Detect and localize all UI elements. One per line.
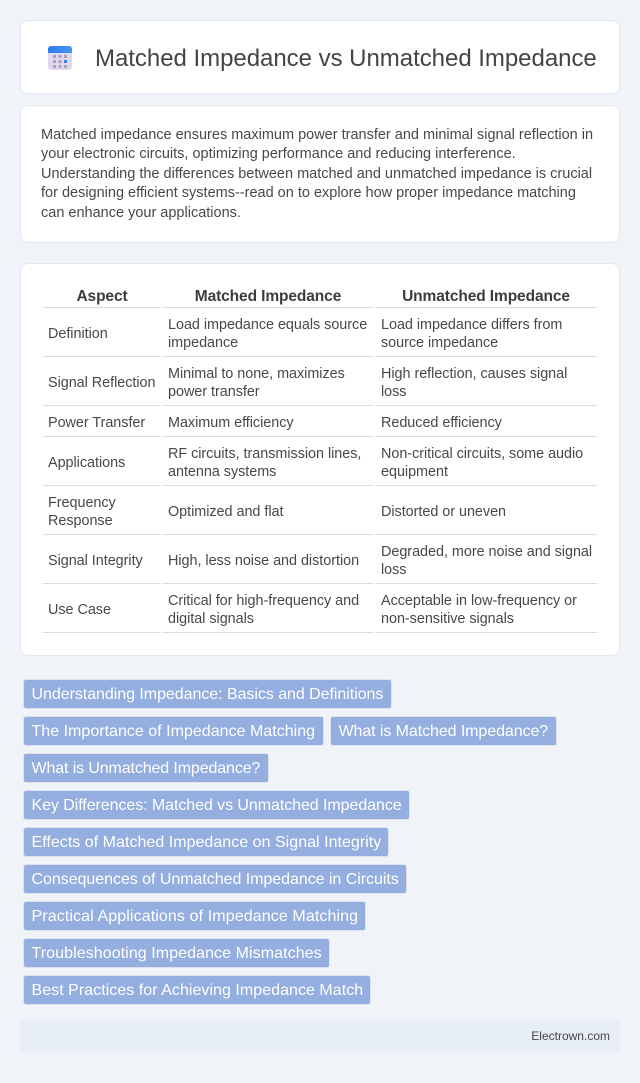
row: signal reflection: loss (381, 384, 406, 400)
tag: Consequences of Unmatched Impedance in Circuits (32, 871, 399, 888)
tag: Key Differences: Matched vs Unmatched Impedance (32, 797, 402, 814)
row: applications: RF circuits, transmission lines, (168, 446, 361, 462)
tag: Understanding Impedance: Basics and Definitions (32, 686, 383, 703)
intro paragraph (41, 126, 593, 220)
header panel (20, 20, 620, 94)
row: use case (48, 593, 577, 627)
row lines (43, 307, 597, 633)
row: use case: Use Case (48, 602, 111, 618)
icon: calendar grid (48, 46, 72, 70)
row: signal integrity: loss (381, 562, 406, 578)
title: Matched Impedance vs Unmatched Impedance (95, 45, 597, 72)
footer credit: Electrown.com (531, 1029, 610, 1043)
row: signal integrity (48, 544, 592, 578)
row: frequency response: Distorted or uneven (381, 504, 506, 520)
row: power transfer (48, 415, 502, 431)
tag: What is Unmatched Impedance? (32, 760, 260, 777)
tag: Effects of Matched Impedance on Signal Integrity (32, 834, 381, 851)
row: applications (48, 446, 583, 480)
tag (23, 827, 389, 857)
intro paragraph: your electronic circuits, optimizing performance and reducing interference. (41, 146, 516, 162)
row: applications: antenna systems (168, 464, 276, 480)
tag (23, 790, 410, 820)
tag: The Importance of Impedance Matching (32, 723, 315, 740)
tag: What is Matched Impedance? (338, 723, 548, 740)
tag: Troubleshooting Impedance Mismatches (32, 945, 322, 962)
intro paragraph: Understanding the differences between matched and unmatched impedance is crucial (41, 166, 592, 182)
comparison table panel (20, 263, 620, 656)
row: power transfer: Power Transfer (48, 415, 145, 431)
row: power transfer: Reduced efficiency (381, 415, 502, 431)
intro paragraph: can enhance your applications. (41, 204, 241, 220)
table header: Unmatched Impedance (402, 288, 570, 305)
tag (23, 679, 392, 709)
row: applications: Non-critical circuits, some audio (381, 446, 583, 462)
tag (330, 716, 557, 746)
row: frequency response: Frequency (48, 495, 116, 511)
row: signal reflection: Minimal to none, maximizes (168, 366, 345, 382)
tag: Best Practices for Achieving Impedance Match (32, 982, 363, 999)
tag (23, 864, 407, 894)
row: signal integrity: Degraded, more noise and signal (381, 544, 592, 560)
row: signal reflection: Signal Reflection (48, 375, 155, 391)
row: signal integrity: High, less noise and distortion (168, 553, 359, 569)
row: use case: digital signals (168, 611, 254, 627)
row: power transfer: Maximum efficiency (168, 415, 294, 431)
tag: Practical Applications of Impedance Matching (32, 908, 358, 925)
intro paragraph: for designing efficient systems--read on to explore how proper impedance matching (41, 185, 576, 201)
table header (76, 288, 570, 305)
row: signal reflection: power transfer (168, 384, 260, 400)
table header: Aspect (76, 288, 128, 305)
row: use case: Critical for high-frequency and (168, 593, 359, 609)
row: signal integrity: Signal Integrity (48, 553, 143, 569)
tag (23, 975, 371, 1005)
row: frequency response: Response (48, 513, 113, 529)
tag (23, 753, 269, 783)
row: applications: equipment (381, 464, 448, 480)
tag (23, 716, 324, 746)
footer bar (20, 1019, 620, 1053)
row: definition: Load impedance equals source (168, 317, 367, 333)
row: definition (48, 317, 562, 351)
topic tags (23, 679, 557, 1005)
intro text panel (20, 105, 620, 243)
row: signal reflection: High reflection, causes signal (381, 366, 567, 382)
row: definition: Load impedance differs from (381, 317, 562, 333)
row: frequency response (48, 495, 506, 529)
row: use case: non-sensitive signals (381, 611, 514, 627)
intro paragraph: Matched impedance ensures maximum power transfer and minimal signal reflection in (41, 126, 593, 142)
row: signal reflection (48, 366, 567, 400)
row: frequency response: Optimized and flat (168, 504, 283, 520)
tag (23, 901, 366, 931)
table header: Matched Impedance (195, 288, 341, 305)
row: definition: Definition (48, 326, 108, 342)
row: definition: source impedance (381, 335, 498, 351)
row: use case: Acceptable in low-frequency or (381, 593, 577, 609)
tag (23, 938, 330, 968)
row: definition: impedance (168, 335, 238, 351)
row: applications: Applications (48, 455, 125, 471)
